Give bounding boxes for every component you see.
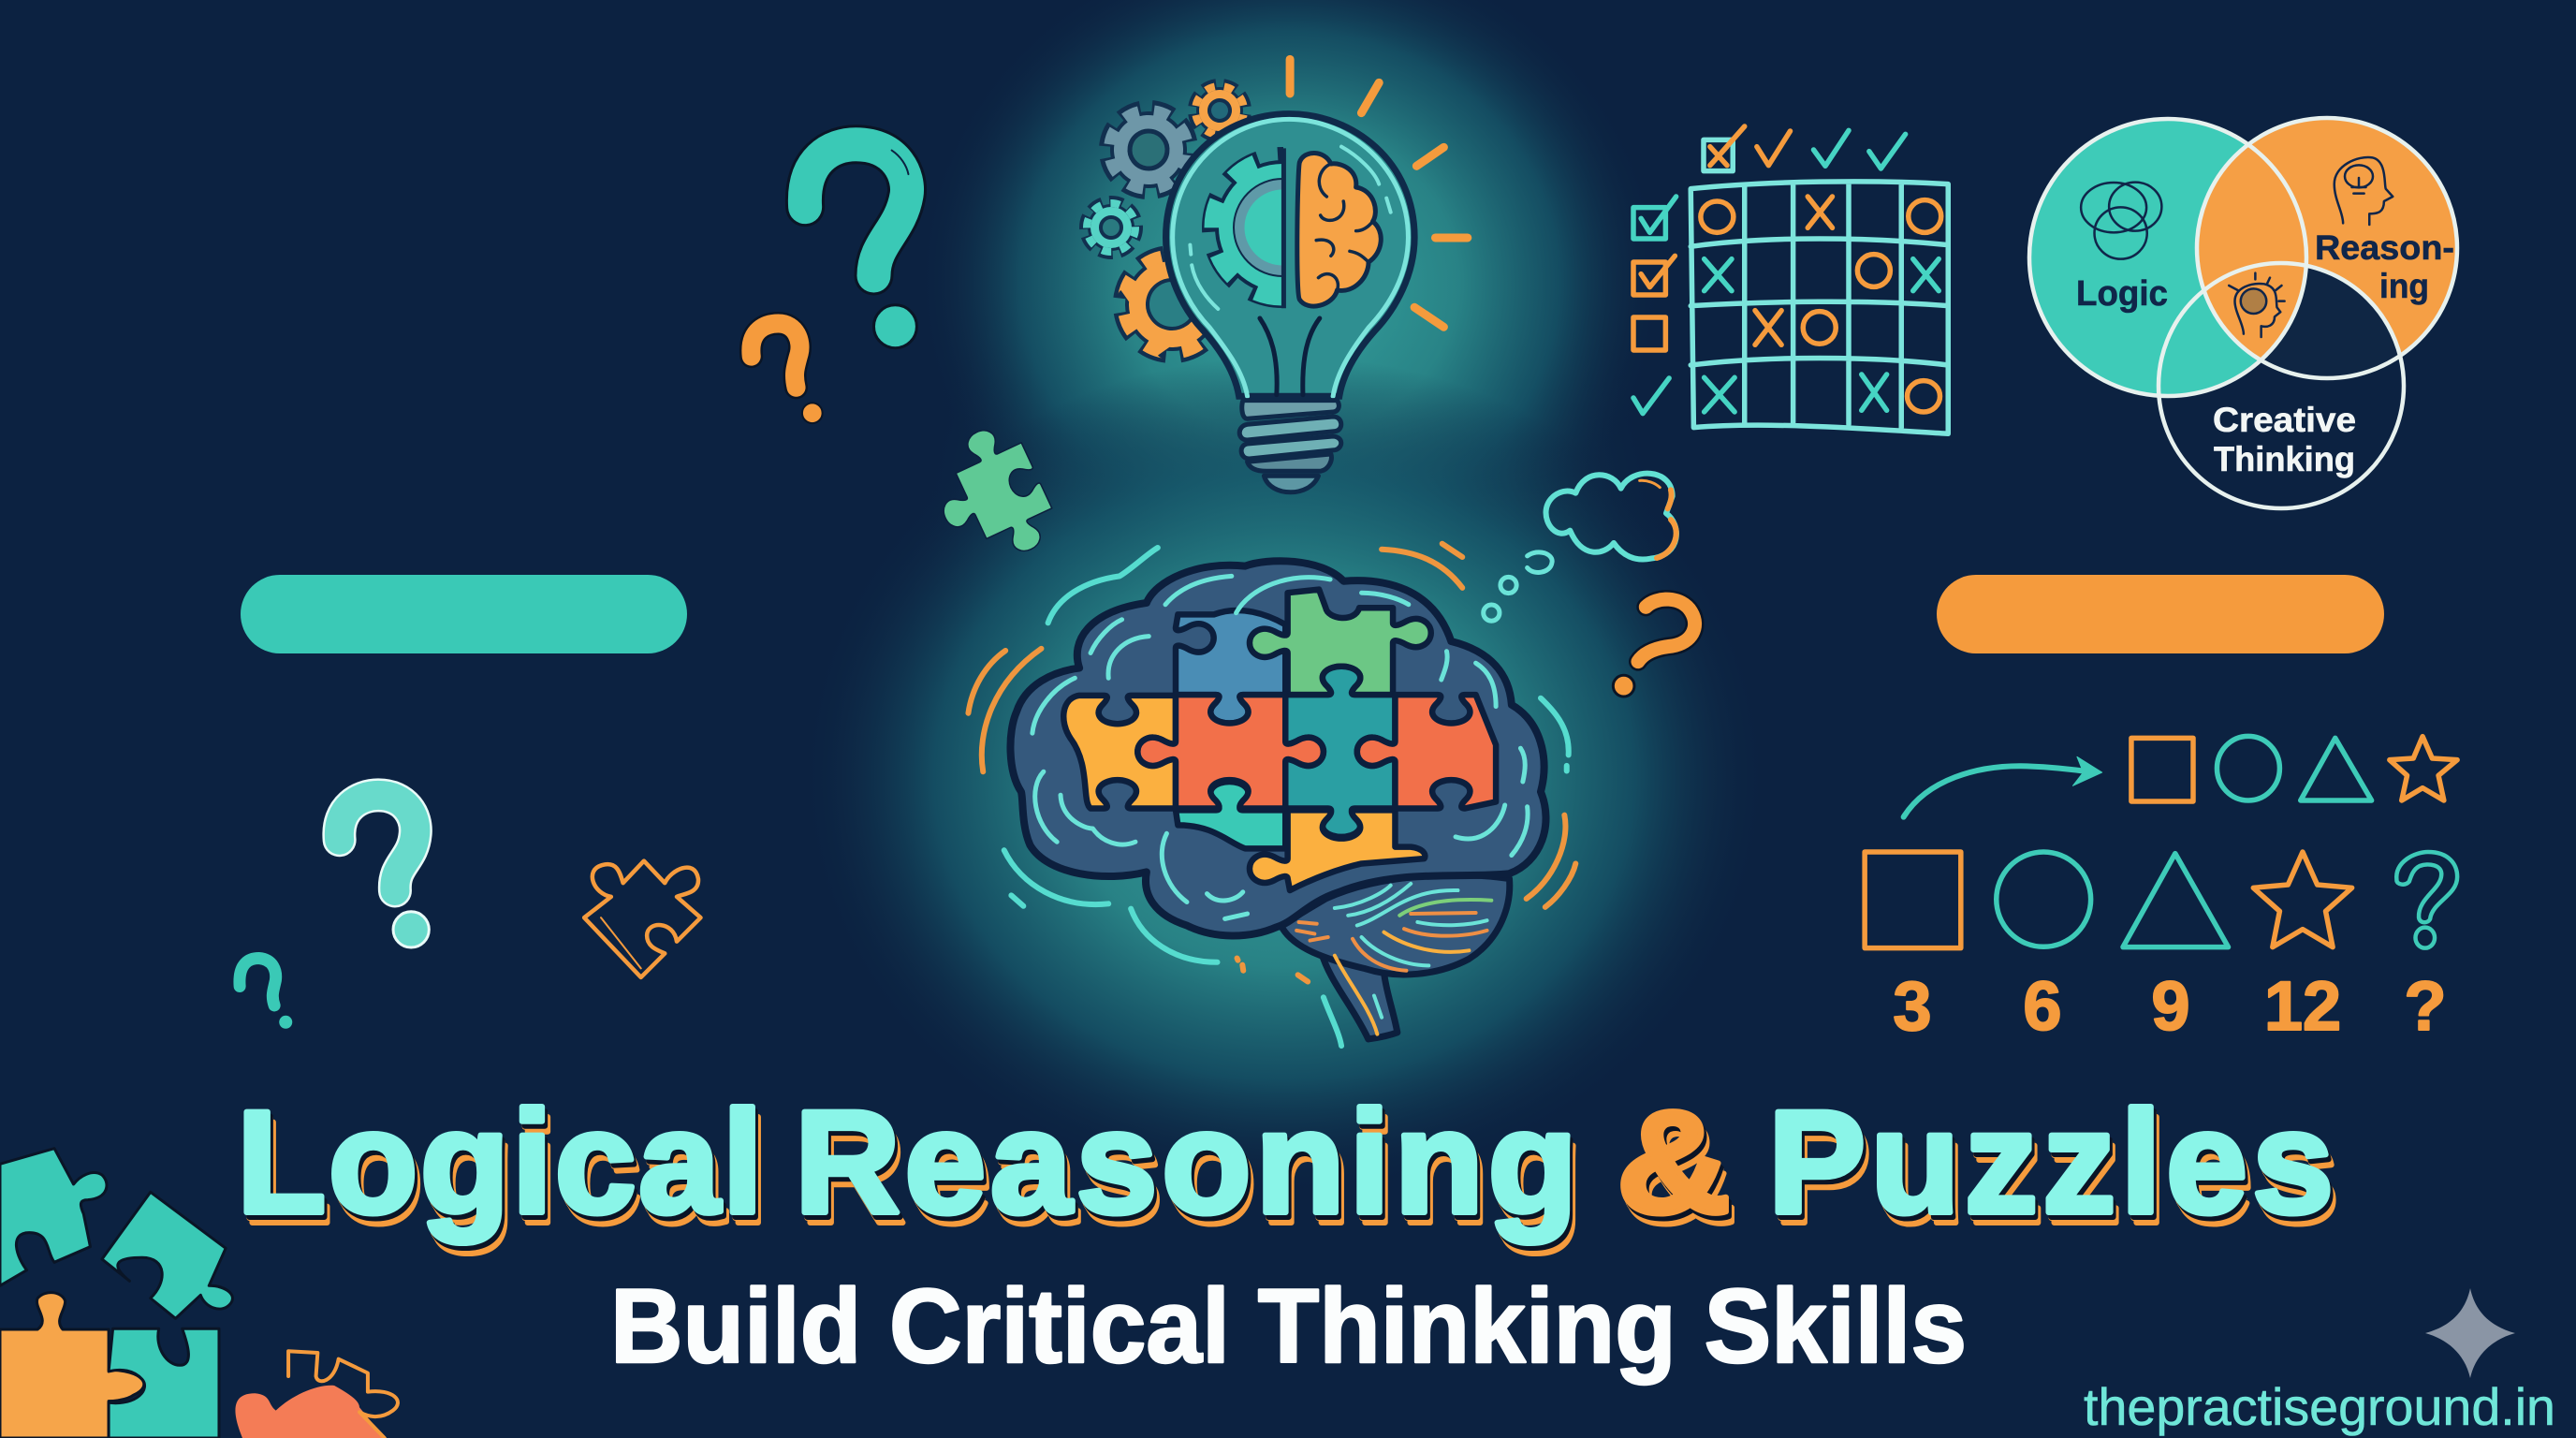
puzzle piece: blue: [1176, 610, 1285, 723]
checkboxes and ticks: [1633, 126, 1906, 414]
puzzle piece: orange center: [1137, 695, 1324, 809]
icon: brain with jigsaw puzzle: [968, 544, 1575, 1046]
bulb screw base: [1239, 401, 1341, 492]
puzzle piece: yellow left: [1063, 696, 1176, 809]
number row: 3: [1893, 967, 1932, 1045]
cerebrum: [1010, 561, 1546, 935]
puzzle grid with marks: [1633, 126, 1948, 433]
icon: green puzzle piece: [918, 417, 1064, 577]
icon: orange question mark near brain: [1613, 599, 1695, 697]
label: Creative Thinking: [2213, 401, 2356, 478]
icon: orange outline puzzle piece: [584, 861, 701, 977]
cerebellum stripes: [1296, 884, 1491, 1034]
motion lines around brain: [968, 544, 1575, 1046]
icon: light bulb with gears and brain: [1086, 59, 1468, 492]
title: [237, 1081, 2334, 1244]
bar: orange blank label: [1937, 575, 2384, 653]
half gear inside bulb: [1202, 147, 1283, 308]
icon: tiny teal question mark: [240, 959, 292, 1029]
glow: behind bulb and brain: [798, 0, 1771, 1198]
puzzle piece: teal center: [1285, 667, 1395, 837]
number row: 9: [2151, 967, 2190, 1045]
title: Puzzles: [1768, 1081, 2334, 1244]
pattern shapes: [1865, 736, 2457, 948]
piece: coral: [235, 1386, 385, 1438]
orange marks: [1701, 197, 1941, 412]
gear: grey: [1103, 104, 1194, 196]
number row: [1893, 967, 2447, 1045]
number row: 12: [2264, 967, 2341, 1045]
puzzle piece: green: [1250, 590, 1431, 695]
left decorative icons: [240, 144, 1064, 1029]
arrow: [1904, 756, 2102, 817]
brain highlights: [1032, 576, 1528, 918]
teal marks: [1705, 259, 1939, 412]
grid lines: [1690, 182, 1948, 433]
icon: thought cloud: [1546, 474, 1676, 560]
label: Logic: Logic: [2076, 274, 2168, 314]
gear: large orange: [1116, 248, 1228, 360]
puzzle piece: teal bottom: [1176, 782, 1285, 848]
bulb glass: [1166, 114, 1414, 396]
icon: head with bulb: [2334, 157, 2393, 225]
mini icons inside venn: [2081, 157, 2393, 337]
gear: small teal: [1086, 202, 1136, 253]
title: Logical: [237, 1081, 763, 1244]
label: Reasoning: ing: [2379, 267, 2429, 305]
brain stem: [1322, 952, 1398, 1039]
venn diagram: [2029, 118, 2457, 508]
label: Creative Thinking: Thinking: [2214, 440, 2355, 478]
overlap: all three: [2206, 265, 2305, 358]
large shape row: [1865, 852, 2457, 948]
icon: mini venn: [2081, 183, 2161, 259]
cerebellum: [1281, 875, 1510, 975]
piece: orange outline: [288, 1351, 398, 1438]
gear: small orange: [1190, 81, 1250, 140]
rays: [1290, 59, 1468, 327]
icon: sparkle: [2425, 1288, 2515, 1378]
circle: reasoning: [2197, 118, 2457, 378]
bar: teal blank label: [241, 575, 687, 653]
puzzle piece: orange right: [1357, 695, 1496, 809]
title: &: [1617, 1081, 1731, 1244]
overlap: reasoning and creative: [2264, 268, 2398, 376]
icon: head with brain: [2229, 273, 2285, 337]
icon: light teal question mark: [339, 795, 429, 947]
icon: big teal question mark: [805, 144, 916, 348]
subtitle: Build Critical Thinking Skills: [610, 1268, 1967, 1385]
corner puzzle pile: [0, 1149, 398, 1438]
number row: ?: [2404, 967, 2447, 1045]
thought bubbles: [1484, 552, 1552, 621]
small shape row: [2131, 736, 2457, 801]
label: Reasoning: Reason-: [2315, 228, 2454, 267]
piece: teal lower: [109, 1328, 219, 1438]
piece: teal upper right: [102, 1192, 232, 1318]
piece: teal upper left: [0, 1149, 107, 1285]
label: Reasoning: [2315, 228, 2454, 305]
puzzle piece: yellow bottom: [1250, 810, 1425, 890]
label: Creative Thinking: Creative: [2213, 401, 2356, 439]
number row: 6: [2023, 967, 2062, 1045]
website url: thepractiseground.in: [2084, 1377, 2555, 1436]
title: Reasoning: [795, 1081, 1577, 1244]
icon: small orange question mark: [751, 324, 823, 423]
circle: logic: [2029, 119, 2306, 396]
half brain inside bulb: [1283, 148, 1381, 308]
venn outlines: [2029, 118, 2457, 508]
piece: orange: [0, 1293, 144, 1438]
